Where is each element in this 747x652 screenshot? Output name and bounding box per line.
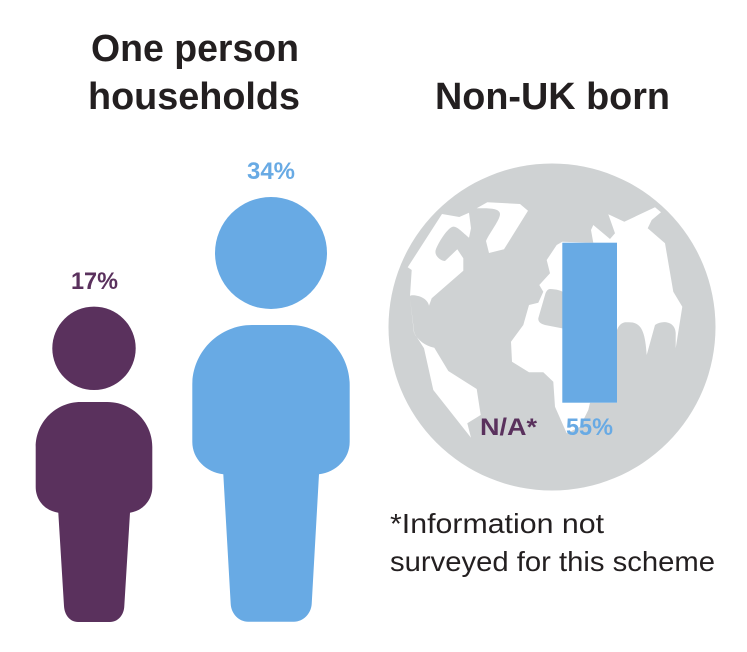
bar: 55% non-UK born [562, 243, 617, 403]
footnote: surveyed for this scheme [390, 546, 715, 577]
heading: One person households: One person [91, 28, 299, 70]
heading: One person households: households [88, 76, 300, 118]
label: 34%: 34% [247, 158, 295, 185]
label: 17%: 17% [71, 268, 118, 295]
label: N/A*: N/A* [480, 414, 538, 441]
label: 55%: 55% [566, 414, 613, 441]
heading: Non-UK born: Non-UK born [435, 76, 670, 118]
heading: One person households [88, 28, 300, 118]
icon: blue person [192, 197, 350, 622]
icon: purple person [36, 307, 152, 622]
icon: globe [388, 164, 716, 490]
footnote [390, 508, 715, 577]
footnote: *Information not [390, 508, 604, 539]
